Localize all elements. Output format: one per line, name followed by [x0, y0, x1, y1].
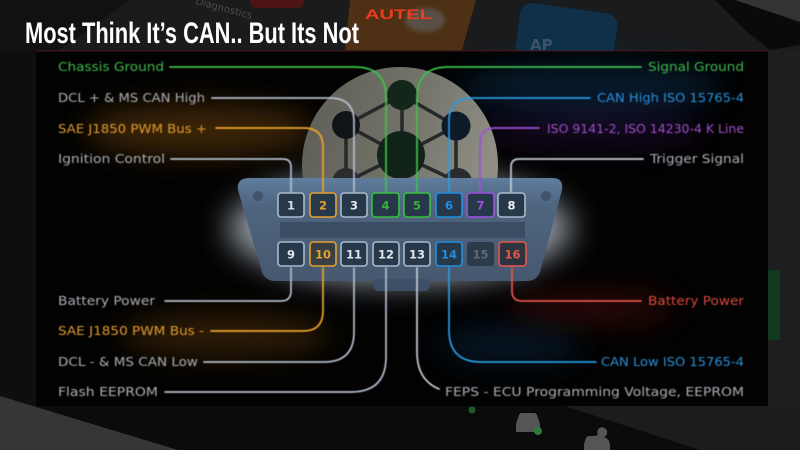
pin 16	[499, 242, 526, 266]
pin 3: 3	[350, 198, 358, 212]
title: Most Think It’s CAN.. But Its Not	[25, 17, 359, 50]
pin 10: 10	[315, 248, 331, 262]
pin 15: 15	[472, 248, 489, 262]
OBD connector body	[238, 178, 562, 291]
glow: coloured halos behind labels	[85, 62, 720, 363]
panel: main black pinout panel	[36, 51, 768, 406]
label: signal ground: Signal Ground	[648, 60, 744, 74]
wire: pin 7 K line	[480, 128, 539, 192]
pin 4: 4	[381, 198, 390, 212]
pin 9	[278, 242, 304, 266]
label: DCL+: DCL + & MS CAN High	[58, 91, 205, 105]
label: ignition: Ignition Control	[58, 152, 165, 166]
pin 8: 8	[507, 198, 516, 212]
wires	[165, 67, 643, 392]
label: battery power: Battery Power	[58, 294, 155, 308]
bottom dashboard icons	[468, 406, 610, 450]
wire: pin 3 DCL+	[212, 98, 354, 192]
wire: pin 10 PWM-	[211, 268, 323, 331]
orange app tile	[345, 0, 476, 50]
pin 15	[467, 242, 494, 266]
label: battery power red: Battery Power	[648, 294, 744, 308]
logo: AUTEL: AUTEL	[365, 6, 433, 22]
wire: pin 5 signal ground	[417, 67, 641, 192]
red app tile	[250, 0, 304, 8]
pin 10	[310, 242, 336, 266]
pin 14: 14	[441, 248, 457, 262]
wire: pin 13 FEPS	[417, 268, 439, 389]
pin 2	[310, 193, 336, 217]
pins	[278, 193, 526, 266]
hub icon: hexagon network behind connector	[302, 67, 498, 263]
wire: pin 4 chassis ground	[170, 67, 386, 192]
label: trigger: Trigger Signal	[649, 152, 744, 166]
wire: pin 14 CAN low	[449, 268, 596, 362]
pin 16: 16	[504, 248, 521, 262]
label: CAN low: CAN Low ISO 15765-4	[601, 355, 744, 369]
pin 7	[467, 193, 494, 217]
label: PWM+: SAE J1850 PWM Bus +	[58, 122, 207, 136]
pin 4	[372, 193, 399, 217]
label: PWM-: SAE J1850 PWM Bus -	[58, 324, 204, 338]
pin 2: 2	[319, 198, 327, 212]
wire: pin 11 DCL-	[204, 268, 354, 362]
label: FEPS: FEPS - ECU Programming Voltage, EEPROM	[445, 385, 744, 399]
wire: pin 6 CAN high	[449, 98, 590, 192]
pin 1	[278, 193, 304, 217]
wire: pin 2 PWM+	[216, 128, 323, 192]
pin 12	[373, 242, 399, 266]
wire: pin 9 battery	[165, 268, 291, 301]
pin 7: 7	[476, 198, 485, 212]
label: chassis ground: Chassis Ground	[58, 60, 164, 74]
pin 3	[341, 193, 367, 217]
wire: pin 16 battery	[512, 268, 641, 301]
pin 1: 1	[287, 198, 295, 212]
pin 8	[498, 193, 525, 217]
left labels	[58, 60, 207, 399]
wire: pin 1 ignition	[171, 159, 291, 192]
pin 13	[404, 242, 430, 266]
label: CAN high: CAN High ISO 15765-4	[597, 91, 744, 105]
wire: pin 12 flash	[165, 268, 386, 392]
pin 5	[404, 193, 430, 217]
pin 11: 11	[346, 248, 362, 262]
wire: pin 8 trigger	[511, 159, 643, 192]
pin 5: 5	[413, 198, 421, 212]
pin 6: 6	[445, 198, 453, 212]
right labels	[445, 60, 744, 399]
label: K line: ISO 9141-2, ISO 14230-4 K Line	[547, 122, 744, 136]
pin 13: 13	[409, 248, 425, 262]
pin 9: 9	[287, 248, 295, 262]
pin 6	[436, 193, 462, 217]
pin 12: 12	[378, 248, 394, 262]
pin 14	[436, 242, 462, 266]
connector bottom tab	[374, 279, 429, 291]
blue app tile	[512, 1, 619, 84]
pin 11	[341, 242, 367, 266]
label: flash: Flash EEPROM	[58, 385, 158, 399]
label: DCL-: DCL - & MS CAN Low	[58, 355, 198, 369]
faint AP text on blue tile: AP	[530, 36, 553, 54]
